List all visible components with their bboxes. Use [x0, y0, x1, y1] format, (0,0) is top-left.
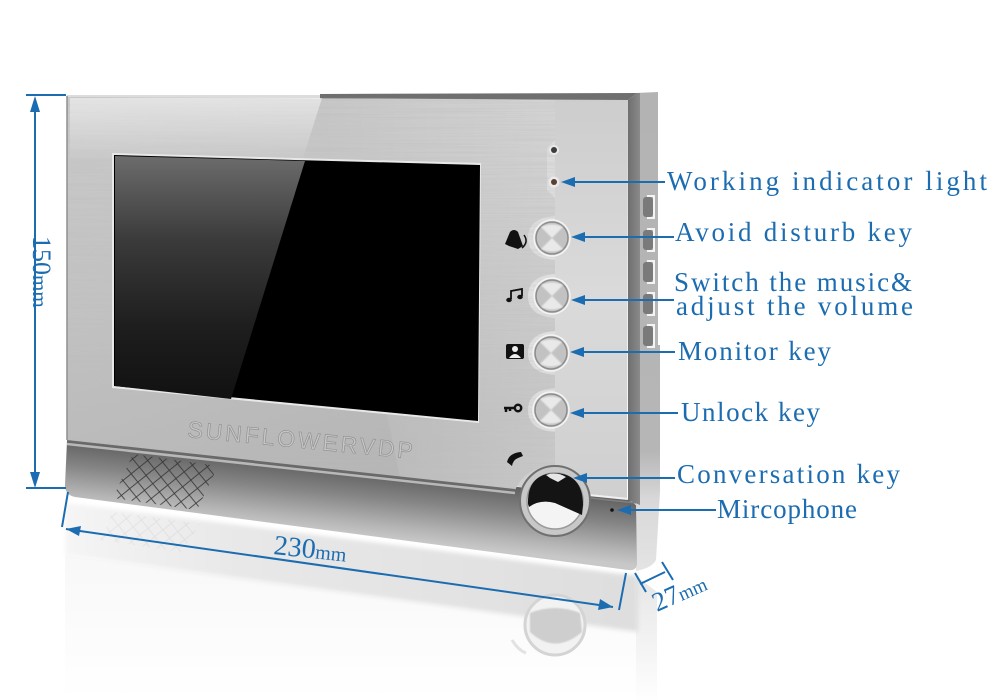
depth dimension 27mm: 27mm	[647, 567, 711, 617]
height dimension 150mm: 150 mm	[27, 236, 56, 308]
indicator lights	[548, 145, 560, 188]
faceplate	[67, 97, 628, 498]
conversation key	[520, 466, 590, 536]
callout: switch the music and adjust the volume: adjust the volume	[676, 291, 913, 321]
callout: switch the music and adjust the volume	[571, 267, 913, 321]
height dimension 150mm	[26, 95, 66, 488]
callout: avoid disturb key: Avoid disturb key	[675, 217, 912, 247]
dark side band	[628, 93, 640, 505]
lower strip	[65, 441, 637, 570]
icon: bell	[505, 230, 526, 249]
side buttons	[643, 196, 654, 347]
intercom device	[65, 92, 660, 571]
outer left edge	[66, 96, 68, 440]
screen	[112, 153, 481, 423]
width dimension 230mm	[62, 492, 626, 610]
keys	[533, 220, 570, 428]
callout: conversation key: Conversation key	[677, 459, 900, 489]
callout: conversation key	[573, 459, 900, 489]
icon: handset	[507, 452, 523, 466]
depth dimension 27mm	[635, 562, 711, 617]
brand text: SUNFLOWERVDP	[187, 416, 414, 464]
top edge	[320, 93, 637, 100]
reflection of device	[65, 503, 657, 700]
callout: microphone: Mircophone	[717, 494, 857, 524]
callout: monitor key	[570, 336, 832, 366]
width dimension 230mm: 230mm	[272, 530, 349, 569]
callout: unlock key: Unlock key	[681, 397, 820, 427]
side panel	[636, 92, 660, 571]
callout: unlock key	[570, 397, 820, 427]
brushed steel panel	[67, 97, 555, 490]
callout: working indicator light: Working indicator light	[667, 166, 987, 196]
icon: music note	[506, 289, 523, 302]
microphone hole	[610, 508, 614, 512]
speaker grille	[113, 454, 218, 510]
callout: microphone	[617, 494, 857, 524]
callout: monitor key: Monitor key	[678, 336, 832, 366]
callout: switch the music and adjust the volume: Switch the music&	[674, 267, 912, 297]
icon: monitor	[506, 344, 524, 359]
top-left glare	[70, 98, 322, 158]
lower plate edge	[67, 441, 515, 490]
icon: key	[504, 405, 521, 412]
callout: avoid disturb key	[571, 217, 912, 247]
